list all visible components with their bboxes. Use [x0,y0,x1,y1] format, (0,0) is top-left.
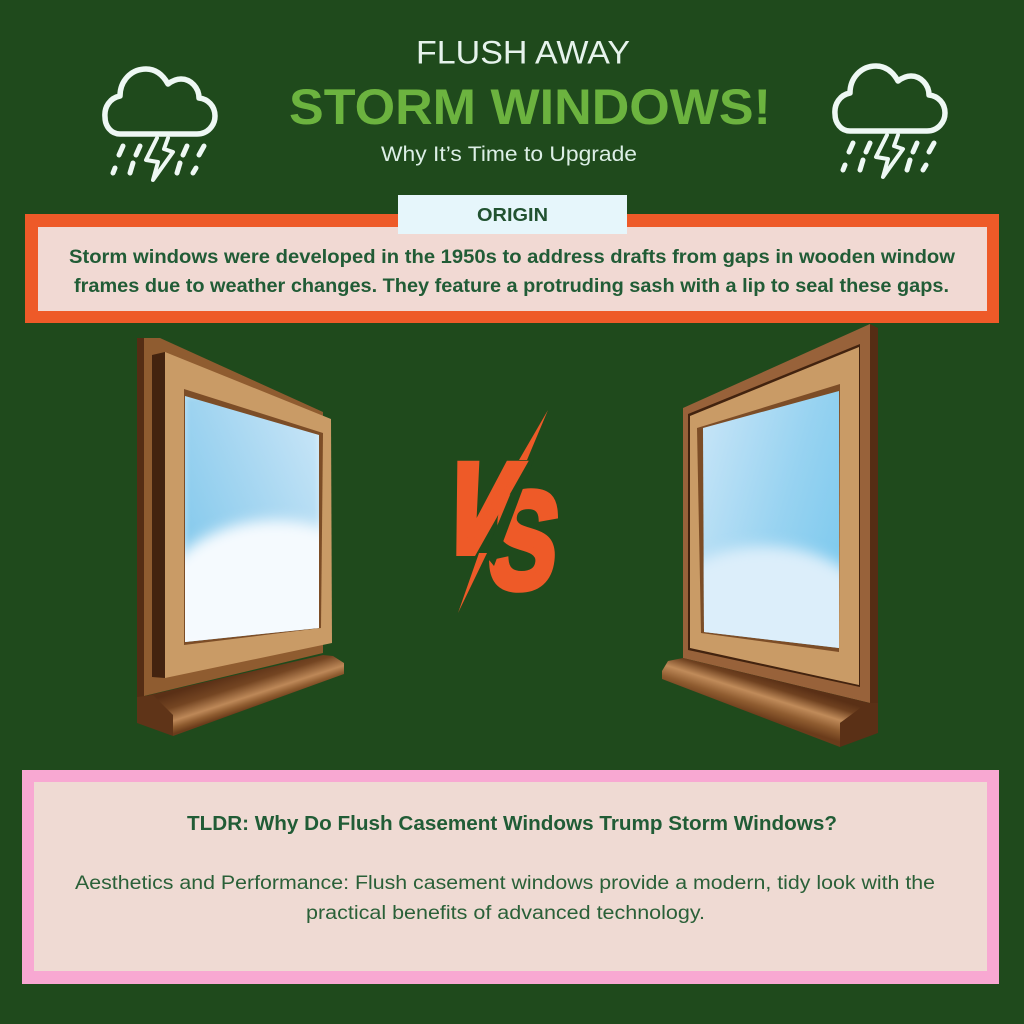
title block [289,34,771,166]
panel: tldr [22,770,999,984]
tldr text [75,873,935,924]
window glass [703,391,839,648]
tldr text: practical benefits of advanced technology. [306,903,705,924]
icon: storm cloud right [835,66,945,177]
panel: origin [25,195,999,323]
origin text: frames due to weather changes. They feature a protruding sash with a lip to seal these gaps. [74,276,949,297]
title: storm windows: STORM WINDOWS! [289,79,771,135]
subtitle: Why It’s Time to Upgrade [381,143,637,166]
window: storm window left [137,338,344,736]
origin tab: ORIGIN [477,205,548,225]
vs badge [428,410,567,618]
icon: storm cloud left [105,69,215,180]
window sill [662,658,878,747]
window sill [137,655,344,736]
tldr heading: TLDR: Why Do Flush Casement Windows Trump Storm Windows? [187,813,837,835]
window: flush window right [662,324,878,747]
origin text [69,247,955,297]
vs badge: V [428,439,530,577]
window glass [185,396,319,642]
origin tab [398,195,627,234]
vs badge: S [483,463,567,618]
title: flush away: FLUSH AWAY [416,34,630,70]
tldr text: Aesthetics and Performance: Flush casement windows provide a modern, tidy look with the [75,873,935,894]
origin text: Storm windows were developed in the 1950s to address drafts from gaps in wooden window [69,247,955,268]
